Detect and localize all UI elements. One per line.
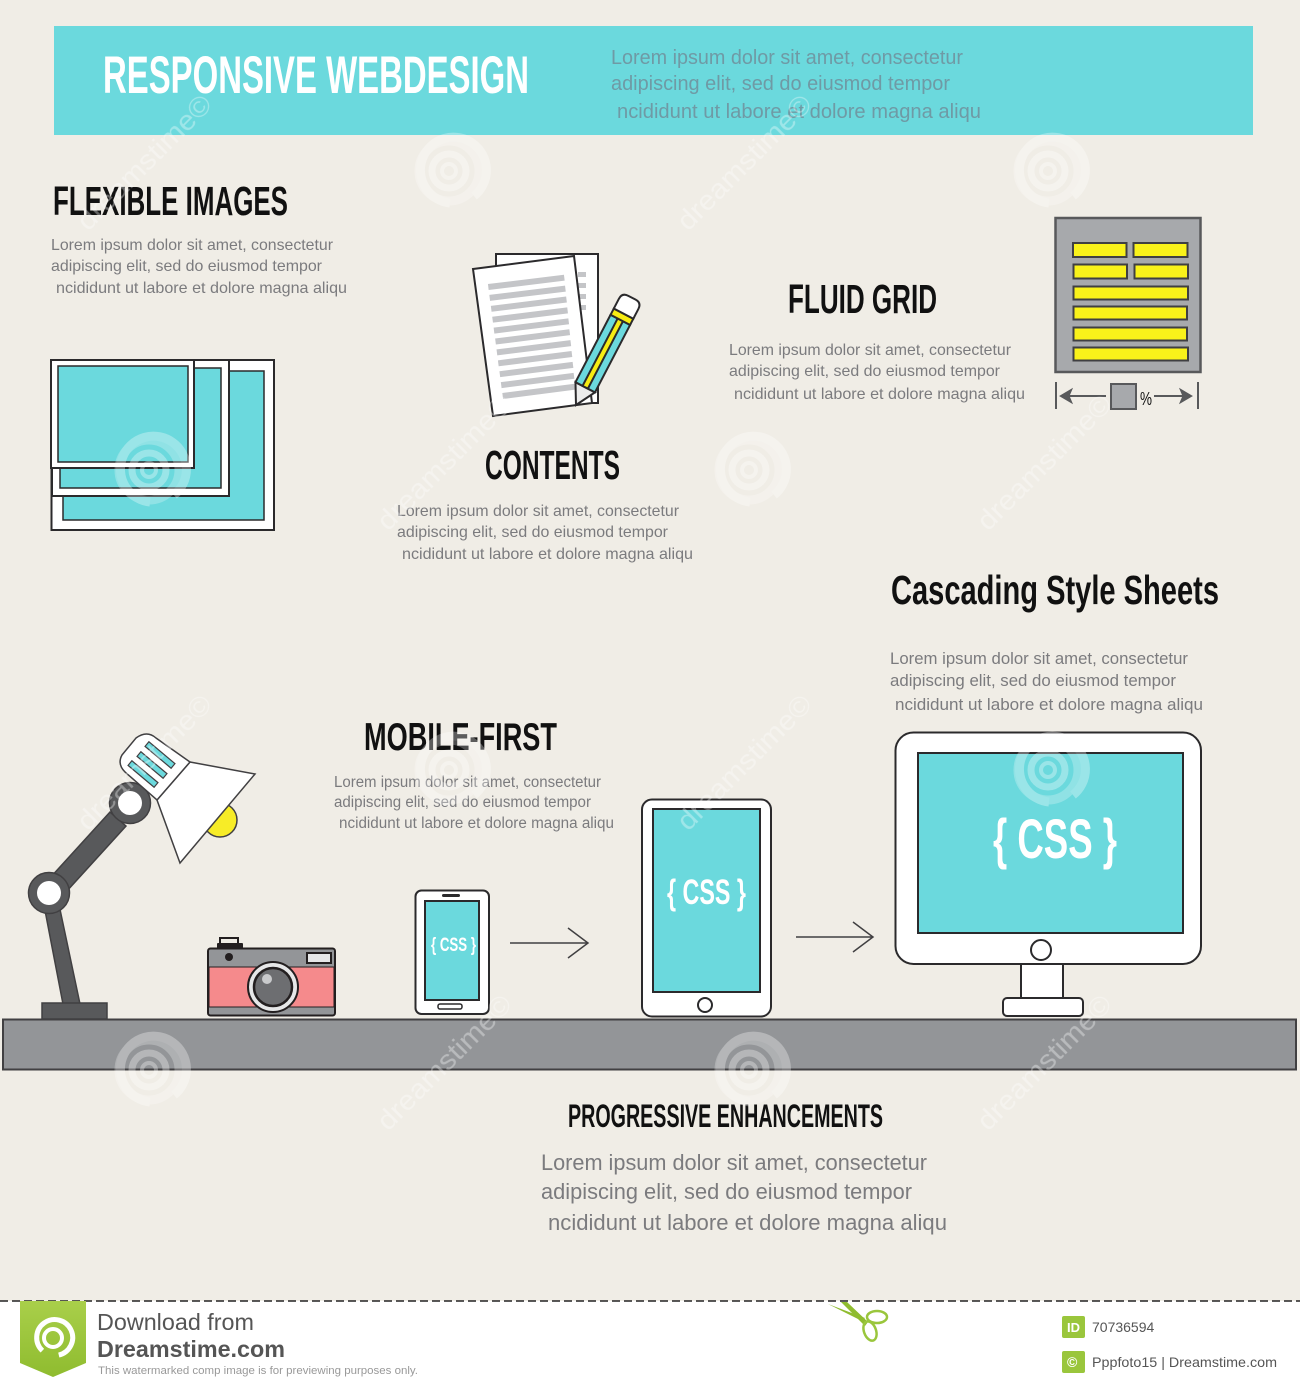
flexible images heading: FLEXIBLE IMAGES — [53, 178, 288, 224]
contents text — [397, 503, 693, 563]
contents heading: CONTENTS — [485, 442, 620, 488]
contents text: ncididunt ut labore et dolore magna aliqu — [402, 546, 693, 563]
banner description: Lorem ipsum dolor sit amet, consectetur — [611, 47, 963, 69]
cascading style sheets text: Lorem ipsum dolor sit amet, consectetur — [890, 649, 1188, 668]
text: dreamstime© — [70, 688, 218, 836]
banner — [54, 26, 1253, 135]
icon: desk lamp — [28, 734, 255, 1019]
progressive enhancements text — [541, 1150, 947, 1235]
cascading style sheets text: ncididunt ut labore et dolore magna aliqu — [895, 695, 1203, 714]
icon: copyright: © — [1067, 1354, 1078, 1370]
fluid grid text — [729, 342, 1025, 403]
download text: Dreamstime.com — [97, 1336, 285, 1362]
icon: phone: { CSS } — [431, 935, 476, 956]
progressive enhancements text: adipiscing elit, sed do eiusmod tempor — [541, 1179, 912, 1204]
download text: This watermarked comp image is for previewing purposes only. — [98, 1365, 418, 1377]
icon: fluid grid layout — [1056, 218, 1200, 409]
fluid grid heading: FLUID GRID — [788, 276, 937, 322]
flexible images text: Lorem ipsum dolor sit amet, consectetur — [51, 237, 334, 254]
text: dreamstime© — [670, 88, 818, 236]
icon: scissors — [828, 1302, 887, 1342]
text: dreamstime© — [670, 688, 818, 836]
flexible images text: ncididunt ut labore et dolore magna aliqu — [56, 280, 347, 297]
fluid grid text: Lorem ipsum dolor sit amet, consectetur — [729, 342, 1012, 359]
icon: tablet — [642, 800, 771, 1016]
mobile-first text: ncididunt ut labore et dolore magna aliqu — [339, 815, 614, 832]
flexible images text — [51, 237, 347, 297]
mobile-first text: Lorem ipsum dolor sit amet, consectetur — [334, 774, 601, 791]
fluid grid text: ncididunt ut labore et dolore magna aliqu — [734, 386, 1025, 403]
arrow: phone to tablet — [510, 928, 588, 958]
banner description — [611, 47, 981, 123]
flexible images text: adipiscing elit, sed do eiusmod tempor — [51, 258, 323, 275]
icon: copyright — [1062, 1351, 1085, 1373]
title: RESPONSIVE WEBDESIGN — [103, 46, 529, 105]
text: dreamstime© — [970, 988, 1118, 1136]
footer — [0, 1301, 1300, 1390]
arrow: tablet to monitor — [796, 922, 873, 952]
icon: fluid grid layout: % — [1140, 389, 1152, 409]
shelf — [3, 1020, 1296, 1070]
icon: stacked images — [51, 360, 274, 530]
progressive enhancements heading: PROGRESSIVE ENHANCEMENTS — [568, 1098, 883, 1134]
author credit: Pppfoto15 | Dreamstime.com — [1092, 1354, 1277, 1370]
fluid grid text: adipiscing elit, sed do eiusmod tempor — [729, 363, 1001, 380]
contents text: adipiscing elit, sed do eiusmod tempor — [397, 524, 669, 541]
text: dreamstime© — [970, 388, 1118, 536]
progressive enhancements text: Lorem ipsum dolor sit amet, consectetur — [541, 1150, 927, 1175]
icon: desktop monitor: { CSS } — [993, 807, 1117, 870]
icon: image id: ID — [1067, 1320, 1080, 1335]
progressive enhancements text: ncididunt ut labore et dolore magna aliqu — [548, 1210, 947, 1235]
download text: Download from — [97, 1309, 254, 1335]
icon: tablet: { CSS } — [667, 873, 746, 912]
banner description: ncididunt ut labore et dolore magna aliqu — [617, 101, 981, 123]
text: dreamstime© — [70, 88, 218, 236]
cascading style sheets text: adipiscing elit, sed do eiusmod tempor — [890, 671, 1176, 690]
mobile-first heading: MOBILE-FIRST — [364, 716, 557, 759]
download text — [97, 1309, 418, 1377]
banner description: adipiscing elit, sed do eiusmod tempor — [611, 73, 950, 95]
icon: desktop monitor — [896, 732, 1201, 1016]
mobile-first text: adipiscing elit, sed do eiusmod tempor — [334, 794, 591, 811]
contents text: Lorem ipsum dolor sit amet, consectetur — [397, 503, 680, 520]
icon: camera — [208, 938, 335, 1016]
image id number: 70736594 — [1092, 1319, 1155, 1335]
icon: dreamstime badge — [20, 1301, 86, 1377]
icon: documents and pencil — [473, 254, 642, 416]
icon: phone — [416, 890, 489, 1014]
cascading style sheets text — [890, 649, 1203, 714]
text: dreamstime© — [370, 388, 518, 536]
text: dreamstime© — [370, 988, 518, 1136]
mobile-first text — [334, 774, 614, 832]
icon: image id — [1062, 1316, 1085, 1338]
